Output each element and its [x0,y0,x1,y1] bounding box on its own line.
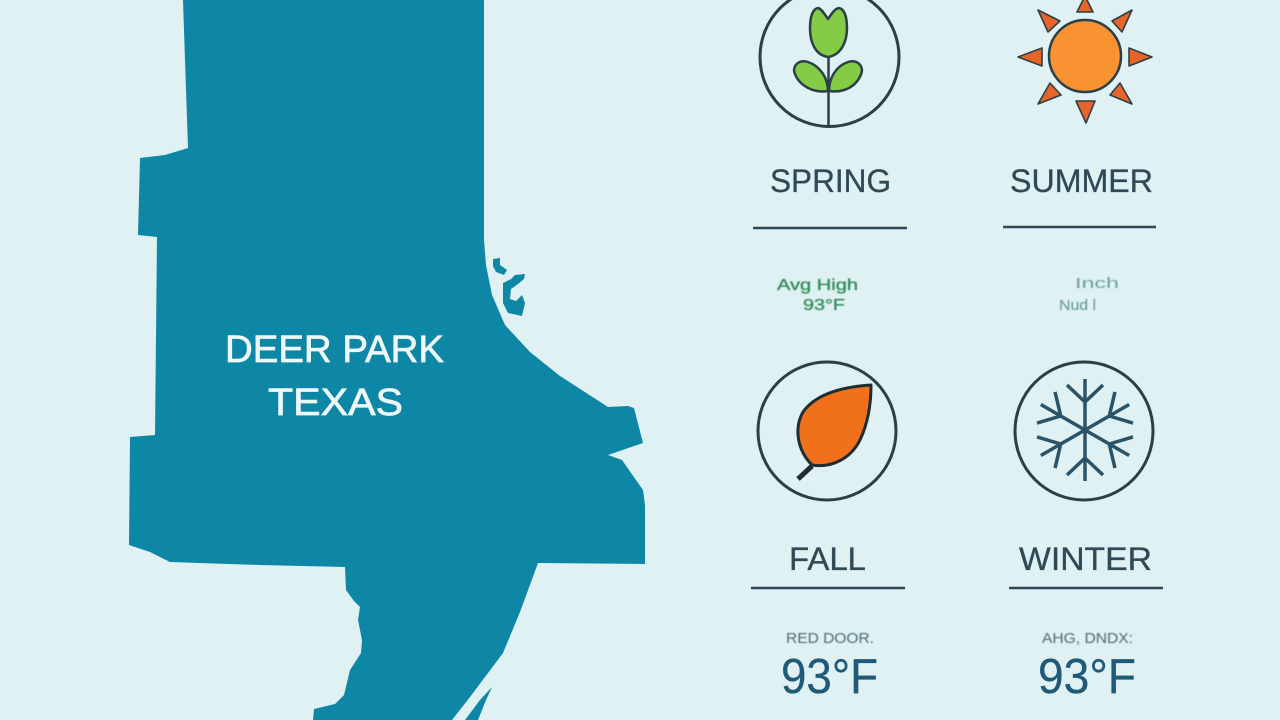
fall temperature: 93°F [781,650,878,704]
panel: spring [753,0,907,314]
icon: summer sun [1018,0,1152,123]
map title: DEER PARK [225,329,444,371]
map title [225,329,444,424]
map title: TEXAS [268,382,403,424]
panel: winter [1009,362,1163,704]
summer heading: SUMMER [1010,163,1153,199]
spring average high: 93°F [803,297,845,314]
fall average high: RED DOOR. [786,630,874,647]
icon: winter snowflake [1015,362,1153,500]
summer average high: Inch [1075,275,1119,292]
winter heading: WINTER [1019,541,1152,577]
spring heading: SPRING [770,163,891,199]
map of Deer Park, Texas [129,0,645,720]
spring average high: Avg High [777,277,858,294]
winter temperature: 93°F [1038,650,1136,704]
summer average high: Nud l [1059,297,1096,314]
winter average high: AHG, DNDX: [1042,630,1133,647]
icon: spring tulip [760,0,899,127]
map: bay islands [493,258,525,316]
summer average high [1059,275,1119,314]
icon: fall leaf [758,362,896,500]
map: southern inlet sliver [465,687,492,720]
spring average high [777,277,858,314]
panel: fall [751,362,905,704]
panel: summer [1003,0,1156,314]
fall heading: FALL [789,541,866,577]
